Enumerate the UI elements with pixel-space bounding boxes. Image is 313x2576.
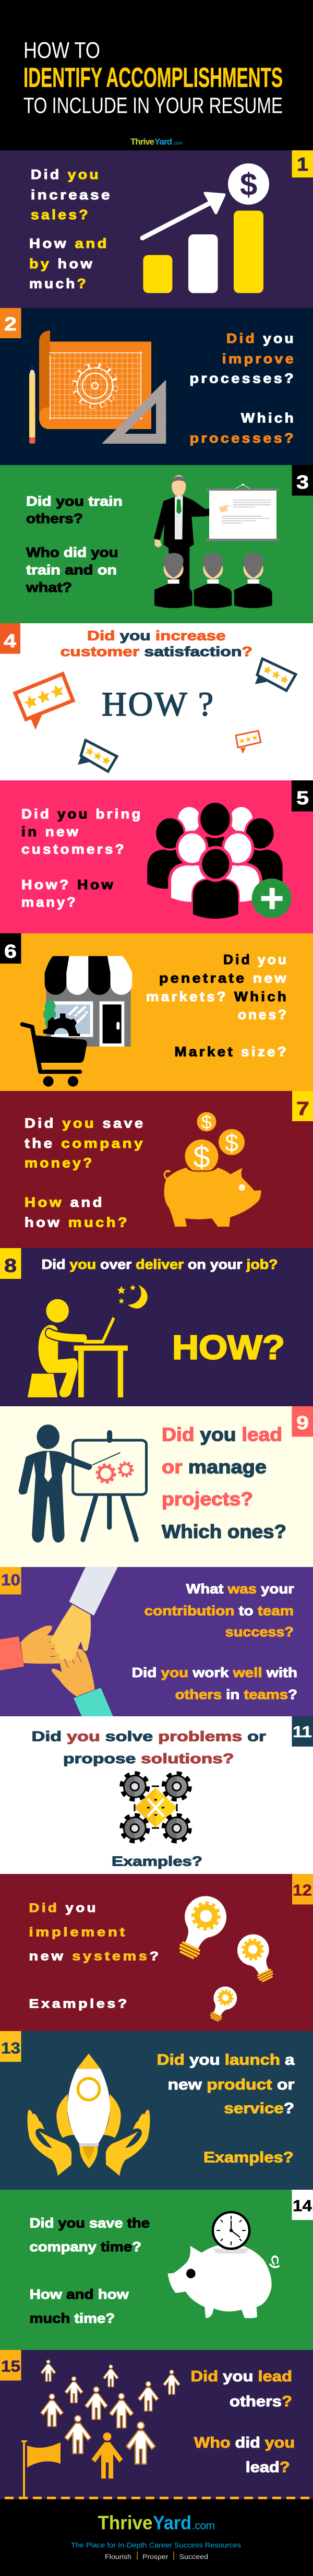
icon: orange review bubble bbox=[15, 674, 73, 730]
text: projects questions: projects? bbox=[162, 1488, 253, 1510]
motto: Flourish bbox=[105, 2553, 131, 2560]
icon: storefront and cart bbox=[22, 956, 132, 1087]
badge 4: 4 bbox=[4, 630, 16, 651]
text: launch questions: Examples? bbox=[203, 2150, 294, 2166]
text: team questions: Did you work well with bbox=[132, 1665, 297, 1680]
icon: team leader bbox=[91, 2432, 123, 2478]
text: projects questions: Which ones? bbox=[162, 1521, 286, 1542]
badge 15 bbox=[0, 2350, 21, 2381]
badge 5 bbox=[292, 780, 313, 812]
text: save money questions: how much? bbox=[25, 1214, 129, 1230]
badge 3: 3 bbox=[296, 471, 309, 493]
text: problems question: Did you solve problems or bbox=[31, 1729, 267, 1744]
panel 10: team success bbox=[0, 1567, 313, 1716]
ground pattern bbox=[5, 2497, 313, 2499]
panel 3: train others bbox=[0, 465, 313, 623]
logo: ThriveYard small bbox=[130, 137, 183, 147]
text: leadership questions: Who did you bbox=[194, 2435, 295, 2451]
text: leadership questions: lead? bbox=[246, 2459, 290, 2476]
text: systems questions bbox=[29, 1901, 161, 2011]
text: processes questions: improve bbox=[222, 351, 296, 366]
icon: navy review bubble bottom bbox=[78, 740, 117, 771]
badge 15: 15 bbox=[1, 2357, 20, 2375]
footer logo bbox=[98, 2512, 215, 2534]
panel 13: launch product bbox=[0, 2031, 313, 2190]
text: markets questions bbox=[146, 952, 288, 1060]
badge 11: 11 bbox=[293, 1723, 312, 1741]
badge 6: 6 bbox=[4, 941, 17, 962]
icon: person working at desk bbox=[28, 1299, 128, 1397]
badge 12: 12 bbox=[293, 1881, 312, 1900]
text: time questions: company time ? bbox=[30, 2239, 141, 2254]
badge 13 bbox=[0, 2031, 21, 2062]
motto bbox=[105, 2551, 208, 2560]
text: markets questions: ones? bbox=[238, 1006, 288, 1022]
panel 7: save money bbox=[0, 1091, 313, 1248]
badge 2: 2 bbox=[4, 313, 17, 335]
text: processes questions: Which bbox=[241, 410, 296, 425]
panel 9: lead projects bbox=[0, 1406, 313, 1567]
text: sales questions: much? bbox=[29, 276, 88, 291]
text: markets questions: Market size? bbox=[174, 1044, 288, 1060]
badge 12 bbox=[292, 1874, 313, 1904]
text: sales questions: increase bbox=[31, 187, 112, 203]
text: projects questions: Did you lead bbox=[162, 1424, 282, 1445]
text: sales questions: Did you bbox=[31, 167, 101, 182]
panel 11: solve problems bbox=[0, 1716, 313, 1874]
icon: large gear bulb bbox=[168, 1889, 233, 1964]
text: save money questions: the company bbox=[25, 1135, 145, 1151]
badge 6 bbox=[0, 933, 21, 964]
icon: rising bar chart bbox=[142, 163, 269, 293]
icon: small orange review bubble bbox=[236, 731, 261, 754]
title: HOW TO bbox=[23, 38, 100, 63]
badge 7: 7 bbox=[296, 1098, 309, 1119]
icon: rocket in hands bbox=[27, 2053, 150, 2176]
text: systems questions: implement bbox=[29, 1926, 127, 1940]
badge 11 bbox=[292, 1716, 313, 1747]
icon: gears with solution bbox=[122, 1774, 189, 1841]
icon: piggy bank with coins bbox=[164, 1111, 261, 1227]
panel 2: improve processes bbox=[0, 308, 313, 465]
badge 2 bbox=[0, 308, 21, 338]
badge 10 bbox=[0, 1567, 21, 1595]
panel 8: over deliver bbox=[0, 1248, 313, 1406]
icon: piggy bank with coins: $ bbox=[225, 1129, 238, 1156]
text: training questions: others? bbox=[26, 511, 83, 526]
text: systems questions: Did you bbox=[29, 1901, 98, 1915]
badge 10: 10 bbox=[1, 1571, 20, 1589]
text: leadership questions bbox=[191, 2368, 295, 2476]
text: launch questions: Did you launch a bbox=[157, 2052, 295, 2069]
text: save money questions: Did you save bbox=[25, 1115, 146, 1131]
badge 7 bbox=[292, 1091, 313, 1121]
text: customers questions: Did you bring bbox=[21, 806, 143, 822]
text: systems questions: Examples? bbox=[29, 1997, 129, 2011]
text: satisfaction question: customer satisfaction ? bbox=[61, 644, 252, 659]
text: projects questions bbox=[162, 1424, 286, 1542]
text: time questions: Did you save the bbox=[30, 2215, 150, 2231]
text: launch questions: service ? bbox=[224, 2100, 294, 2117]
text: customers questions: How? How bbox=[21, 877, 115, 893]
text: save money questions: How and bbox=[25, 1194, 104, 1210]
text: customers questions bbox=[21, 806, 143, 910]
footer logo: Thrive bbox=[98, 2512, 152, 2534]
text: satisfaction question bbox=[61, 627, 252, 659]
text: HOW?: HOW ? bbox=[102, 685, 213, 723]
badge 5: 5 bbox=[296, 787, 309, 809]
footer logo: .com bbox=[192, 2520, 215, 2532]
text: customers questions: in new bbox=[21, 824, 80, 839]
icon: clock bbox=[213, 2212, 249, 2249]
badge 8: 8 bbox=[4, 1255, 17, 1276]
text: leadership questions: Did you lead bbox=[191, 2368, 292, 2385]
text: launch questions: new product or bbox=[168, 2076, 294, 2093]
badge 9 bbox=[292, 1406, 313, 1437]
text: time questions bbox=[30, 2215, 150, 2326]
text: processes questions: processes? bbox=[190, 371, 296, 386]
panel 12: new systems bbox=[0, 1874, 313, 2031]
badge 4 bbox=[0, 623, 20, 654]
logo: ThriveYard small: .com bbox=[173, 140, 183, 146]
text: team questions bbox=[132, 1581, 297, 1702]
text: sales questions: How and bbox=[29, 235, 109, 251]
text: training questions: what? bbox=[26, 579, 72, 595]
text: launch questions bbox=[157, 2052, 295, 2166]
text: leadership questions: others ? bbox=[230, 2393, 292, 2410]
icon: small gear bulb bbox=[204, 1983, 241, 2025]
icon: board gears bbox=[97, 1463, 133, 1482]
motto: Succeed bbox=[179, 2553, 208, 2560]
badge 3 bbox=[292, 465, 313, 496]
text: customers questions: many? bbox=[21, 894, 78, 910]
panel 15: lead others bbox=[0, 2350, 313, 2499]
icon: medium gear bulb bbox=[232, 1929, 282, 1986]
text: markets questions: Did you bbox=[223, 952, 288, 967]
text: team questions: What was your bbox=[186, 1581, 294, 1596]
text: examples: Examples? bbox=[112, 1853, 202, 1869]
text: systems questions: new systems ? bbox=[29, 1950, 161, 1964]
badge 9: 9 bbox=[296, 1412, 309, 1433]
badge 13: 13 bbox=[1, 2039, 20, 2057]
text: save money questions bbox=[25, 1115, 146, 1230]
panel 14: save time bbox=[0, 2190, 313, 2350]
badge 14 bbox=[292, 2190, 313, 2220]
icon: piggy bank with coins: $ bbox=[193, 1140, 210, 1174]
text: markets questions: penetrate new bbox=[159, 970, 288, 986]
text: time questions: much time? bbox=[30, 2310, 115, 2326]
text: over deliver question: Did you over deliver on your job? bbox=[42, 1256, 278, 1272]
icon: team hands bbox=[0, 1567, 118, 1716]
icon: white piggy bank bbox=[167, 2243, 280, 2318]
text: satisfaction question: Did you increase bbox=[87, 627, 225, 643]
icon: presenter with audience bbox=[154, 475, 279, 608]
text: HOW?: HOW? bbox=[172, 1328, 285, 1367]
text: training questions: Who did you bbox=[26, 544, 118, 560]
text: sales questions: sales? bbox=[31, 207, 90, 222]
icon: blueprint bbox=[29, 330, 166, 444]
text: processes questions: Did you bbox=[226, 330, 296, 346]
icon: team of people bbox=[41, 2360, 180, 2464]
text: training questions bbox=[26, 493, 123, 595]
text: markets questions: markets? Which bbox=[146, 989, 288, 1004]
badge 1 bbox=[292, 150, 313, 177]
text: projects questions: or manage bbox=[162, 1456, 267, 1477]
badge 1: 1 bbox=[297, 153, 308, 175]
tagline: The Place for In-Depth Career Success Resources bbox=[71, 2541, 241, 2549]
header panel bbox=[0, 0, 313, 150]
icon: presenter at gear board bbox=[19, 1424, 147, 1542]
text: team questions: others in teams ? bbox=[175, 1687, 297, 1702]
title bbox=[23, 38, 283, 118]
text: processes questions bbox=[190, 330, 296, 446]
footer bbox=[0, 2499, 313, 2576]
panel 1: increase sales bbox=[0, 150, 313, 308]
icon: rising bar chart: $ bbox=[240, 167, 257, 202]
logo: ThriveYard small: Yard bbox=[154, 137, 172, 147]
text: customers questions: customers? bbox=[21, 841, 126, 857]
text: team questions: contribution to team bbox=[145, 1602, 294, 1618]
footer logo: Yard bbox=[153, 2512, 191, 2534]
text: problems question bbox=[31, 1729, 267, 1766]
icon: piggy bank with coins: $ bbox=[201, 1111, 212, 1133]
text: sales questions bbox=[29, 167, 112, 291]
logo: ThriveYard small: Thrive bbox=[130, 137, 154, 147]
text: processes questions: processes? bbox=[190, 430, 296, 446]
icon: customer crowd with plus bbox=[147, 801, 292, 919]
panel 5: new customers bbox=[0, 780, 313, 933]
text: problems question: propose solutions? bbox=[63, 1751, 234, 1766]
motto: Prosper bbox=[142, 2553, 168, 2560]
text: sales questions: by how bbox=[29, 256, 94, 271]
text: time questions: How and how bbox=[30, 2286, 129, 2302]
icon: flag bbox=[21, 2440, 61, 2499]
badge 14: 14 bbox=[293, 2197, 312, 2215]
text: team questions: success? bbox=[225, 1624, 294, 1640]
panel 4: customer satisfaction bbox=[0, 623, 313, 780]
text: training questions: train and on bbox=[26, 562, 117, 577]
panel 6: new markets bbox=[0, 933, 313, 1091]
text: save money questions: money? bbox=[25, 1155, 94, 1171]
icon: navy review bubble top right bbox=[255, 659, 296, 691]
badge 8 bbox=[0, 1248, 21, 1279]
icon: moon and stars bbox=[117, 1285, 148, 1309]
text: training questions: Did you train bbox=[26, 493, 123, 509]
